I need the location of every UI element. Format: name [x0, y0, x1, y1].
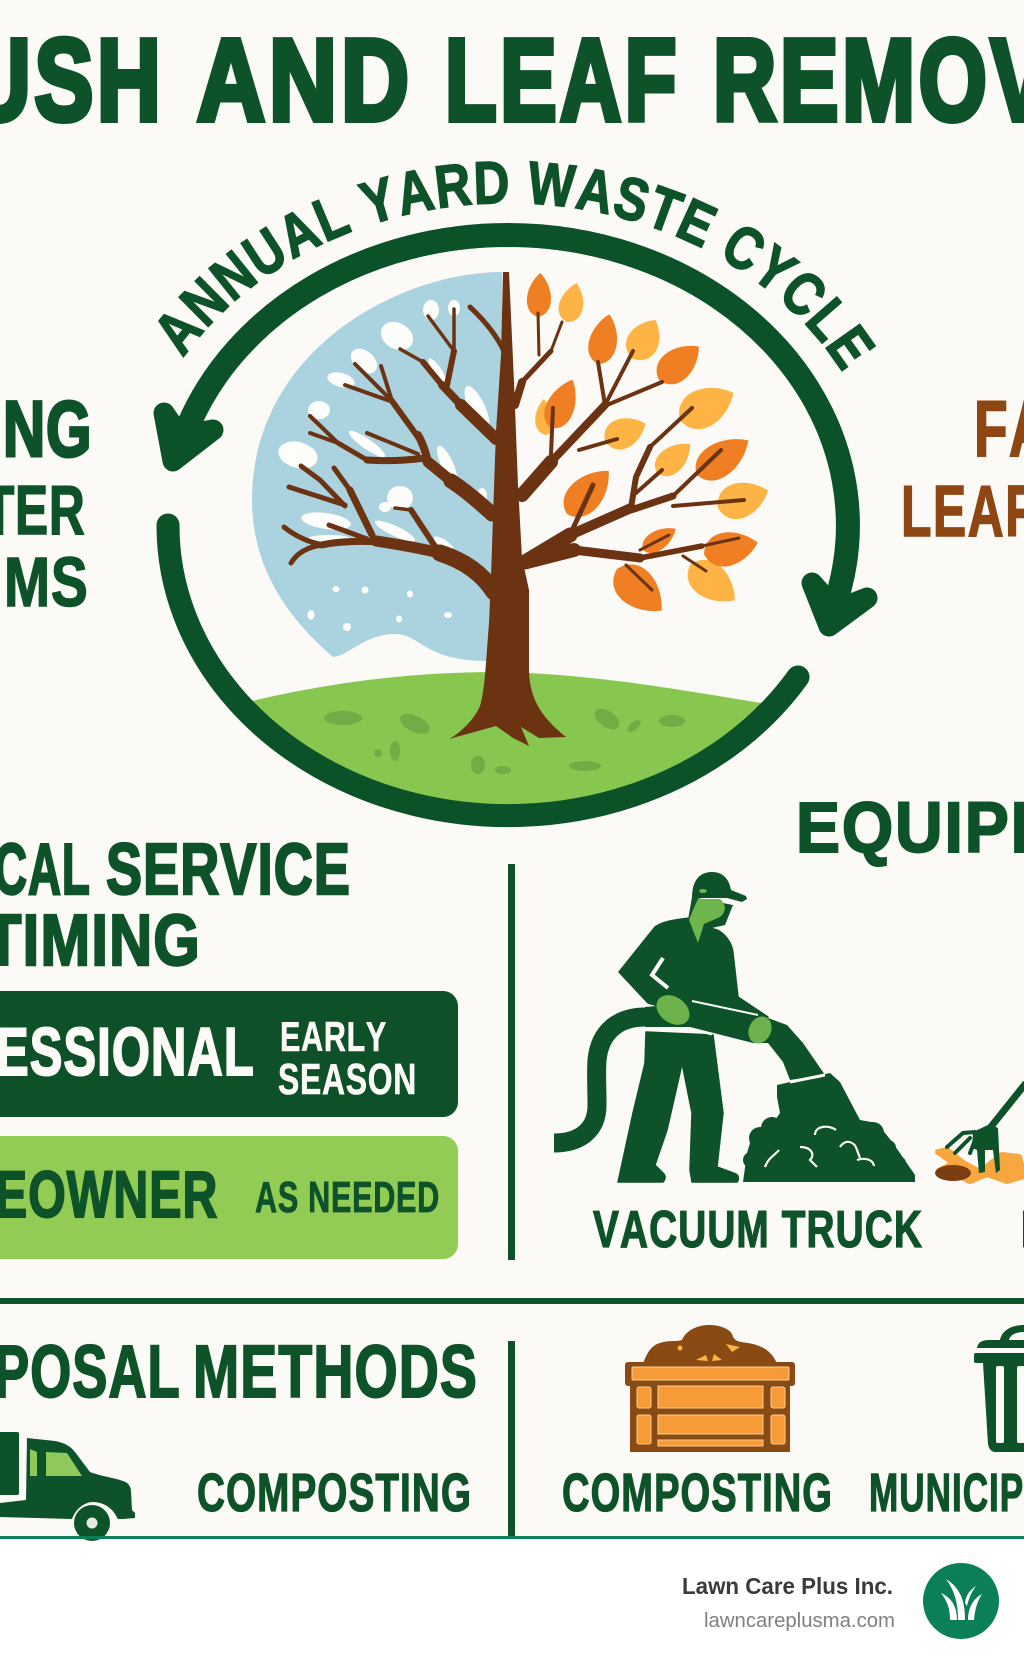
left season label: spring, winter, storms: [0, 384, 92, 622]
footer: logo badge: [923, 1563, 999, 1639]
illustration: tree trunk and branches: [284, 272, 744, 746]
arrowhead: left: [164, 413, 213, 461]
label: vacuum truck: VACUUM TRUCK: [593, 1201, 923, 1259]
title: [0, 15, 1024, 145]
cycle heading: annual yard waste cycle: ANNUAL YARD WASTE CYCLE: [158, 160, 876, 372]
label: composting, right column: COMPOSTING: [562, 1463, 833, 1523]
timing row: professional: EARLY: [280, 1013, 387, 1060]
illustration: grass tufts: [324, 704, 685, 774]
icon: compost crate: [625, 1325, 795, 1452]
illustration: winter sky half: [252, 272, 502, 661]
footer: website: lawncareplusma.com: [704, 1610, 895, 1632]
title: LEAF: [445, 15, 680, 145]
timing row: homeowner: [0, 1136, 458, 1259]
cycle ring: top arrow arc: [164, 235, 867, 626]
icon: rake on leaves: [935, 1083, 1024, 1181]
heading: disposal methods: [0, 1330, 478, 1413]
timing row: homeowner: AS NEEDED: [255, 1173, 440, 1222]
timing row: professional: SEASON: [278, 1055, 417, 1104]
timing row: professional: ESSIONAL: [0, 1013, 255, 1090]
timing row: professional: [0, 991, 458, 1117]
illustration: autumn leaves: [526, 272, 774, 625]
arrowhead: right: [812, 583, 867, 626]
illustration: snow patches and flakes: [275, 300, 494, 631]
left season label: spring, winter, storms: NG: [3, 384, 92, 473]
icon: trash can: [974, 1325, 1024, 1452]
icon: worker with vacuum hose and leaf pile: [554, 872, 915, 1182]
heading: typical service timing: [0, 828, 351, 981]
label: composting, left column: COMPOSTING: [197, 1463, 472, 1523]
cycle ring: bottom arc: [168, 525, 798, 816]
icon: dump truck: [0, 1432, 135, 1541]
left season label: spring, winter, storms: MS: [4, 544, 89, 622]
timing row: homeowner: EOWNER: [0, 1159, 218, 1232]
heading: typical service timing: SERVICE: [106, 830, 351, 910]
heading: disposal methods: METHODS: [193, 1330, 478, 1413]
illustration: green ground: [243, 672, 768, 815]
footer: company name: Lawn Care Plus Inc.: [682, 1573, 893, 1599]
title: AND: [197, 15, 413, 145]
right season label: fall, leaf: [901, 384, 1024, 552]
